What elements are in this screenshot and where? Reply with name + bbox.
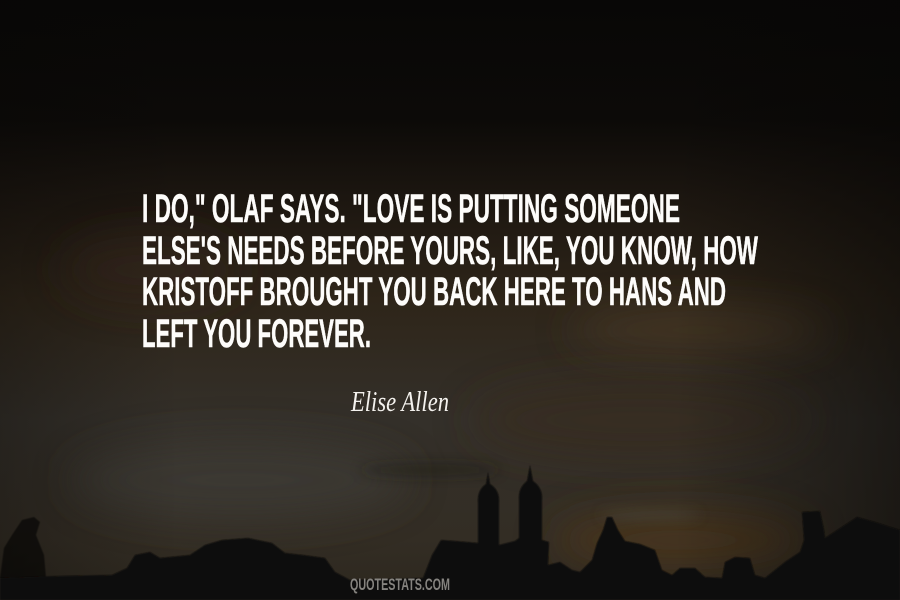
left sapling — [0, 517, 46, 578]
watermark: QUOTESTATS.COM — [350, 575, 450, 594]
author signature: Elise Allen — [350, 387, 449, 418]
quote line 4: LEFT YOU FOREVER. — [142, 312, 371, 356]
silhouette: trees, church and houses on the horizon — [0, 465, 900, 600]
quote text — [142, 187, 758, 356]
